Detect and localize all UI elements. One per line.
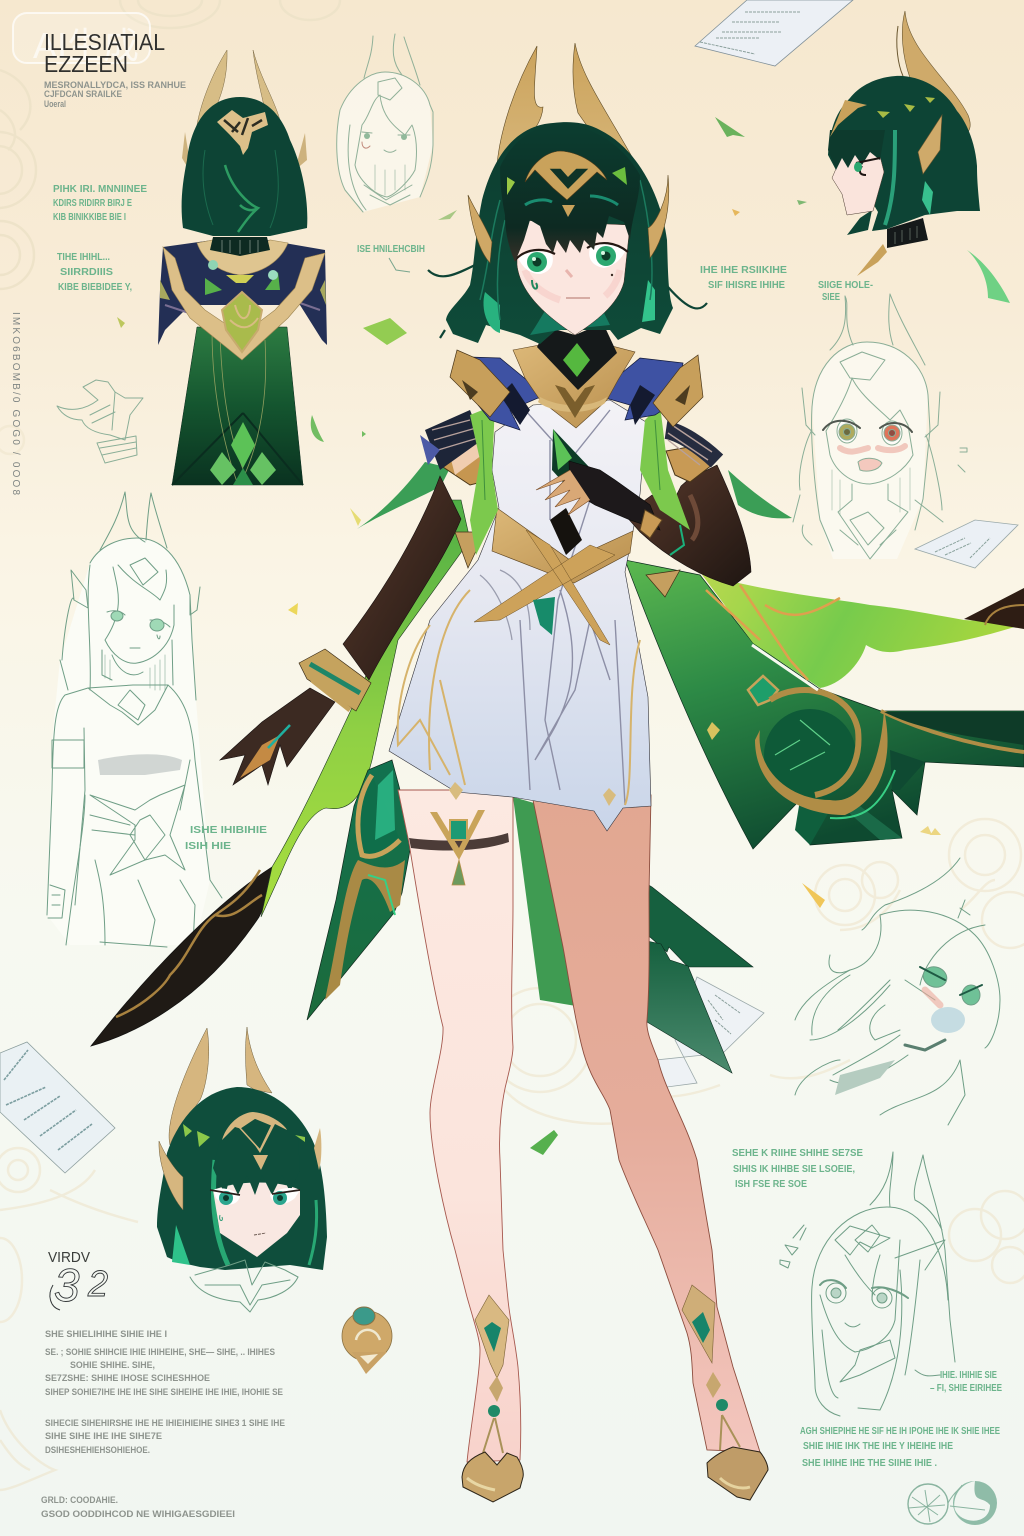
right cape: emblem ring bbox=[707, 676, 895, 818]
green annotation notes: KDIRS RIDIRR BIRJ E bbox=[53, 198, 132, 209]
gold ring charm bbox=[342, 1307, 392, 1374]
main head: golden tiara bbox=[525, 151, 607, 217]
back view: hair ornament bbox=[217, 110, 268, 155]
handwritten number: 3 bbox=[54, 1259, 80, 1311]
watermark badge bbox=[13, 13, 150, 66]
portrait: eyes and mouth bbox=[210, 1188, 300, 1235]
drifting leaves bbox=[117, 117, 1010, 1155]
lower-left stats block: SIHECIE SIHEHIRSHE IHE HE IHIEIHIEIHE SIHE3 1 SIHE IHE bbox=[45, 1418, 285, 1428]
right side wing and gold cuff bbox=[666, 425, 792, 518]
profile: neck collar bbox=[857, 218, 928, 276]
main head: ear fins bbox=[468, 175, 669, 263]
portrait: hair bbox=[157, 1087, 327, 1270]
back view: shoulders and mantle bbox=[158, 240, 327, 345]
right cape: main green panel bbox=[625, 560, 1024, 849]
portrait: collar sketch bbox=[190, 1260, 298, 1312]
pencil sketch: bashful face, top bbox=[337, 34, 433, 212]
lower-left stats block: GRLD: COODAHIE. bbox=[41, 1495, 118, 1505]
hand sketch bbox=[57, 380, 143, 463]
left hand with claws bbox=[220, 688, 335, 785]
green annotation notes: SIHIS IK HIHBE SIE LSOEIE, bbox=[733, 1164, 855, 1175]
green annotation notes: SEHE K RIIHE SHIHE SE7SE bbox=[732, 1148, 863, 1159]
title block bbox=[13, 13, 186, 109]
right leg bbox=[532, 795, 760, 1452]
central cape panel bbox=[307, 760, 410, 1020]
green annotation notes bbox=[53, 184, 1002, 1469]
green annotation notes: SIIRRDIIIS bbox=[60, 267, 113, 278]
green annotation notes: KIB BINIKKIBE BIE I bbox=[53, 212, 126, 223]
circular seal stamp bbox=[908, 1481, 997, 1525]
lower-left stats block: VIRDV bbox=[48, 1249, 90, 1266]
profile: face bbox=[828, 130, 885, 215]
annotation beside standing sketch: ISIH HIE bbox=[185, 841, 231, 852]
green annotation notes: ISH FSE RE SOE bbox=[735, 1179, 807, 1190]
title block: EZZEEN bbox=[44, 51, 128, 77]
lower-left stats block: SE. ; SOHIE SHIHCIE IHIE IHIHEIHE, SHE— SIHE, .. IHIHES bbox=[45, 1347, 275, 1357]
main head: eyes bbox=[515, 243, 628, 289]
green annotation notes: KIBE BIEBIDEE Y, bbox=[58, 282, 132, 293]
handwritten number: 2 bbox=[87, 1263, 108, 1304]
green annotation notes: SHE IHIHE IHE THE SIIHE IHIE . bbox=[802, 1458, 937, 1469]
left cape: lime panel bbox=[261, 500, 470, 917]
back view: golden collar and emblem bbox=[163, 237, 325, 360]
held green gem and black gloved hand bbox=[536, 429, 662, 538]
lower-left stats block: SE7ZSHE: SHIHE IHOSE SCIHESHHOE bbox=[45, 1373, 210, 1383]
main head: front bangs bbox=[500, 125, 640, 262]
green annotation notes: PIHK IRI. MNNIINEE bbox=[53, 184, 147, 195]
right arm glove bbox=[625, 465, 751, 586]
white dress bbox=[389, 400, 651, 831]
green annotation notes: IHE IHE RSIIKIHE bbox=[700, 265, 787, 276]
right cape: lime wing bbox=[700, 572, 1024, 690]
lower-left stats block: SIHE SIHE IHE IHE SIHE7E bbox=[45, 1431, 162, 1441]
blue shoulder pieces bbox=[468, 357, 683, 430]
lower-left stats block: GSOD OODDIHCOD NE WIHIGAESGDIEEI bbox=[41, 1509, 235, 1519]
green annotation notes: – FI, SHIE EIRIHEE bbox=[930, 1383, 1002, 1394]
lime strips beside torso bbox=[470, 405, 690, 555]
right shoe and anklet bbox=[682, 1285, 768, 1500]
profile: horn bbox=[897, 11, 970, 133]
back view figure bbox=[158, 50, 327, 485]
portrait: tiara and gems bbox=[183, 1112, 305, 1170]
bottom-left portrait head bbox=[157, 1027, 327, 1312]
main head: horns bbox=[497, 43, 642, 175]
right cape: lower strips behind leg bbox=[513, 797, 753, 1073]
title block: Uoeral bbox=[44, 99, 66, 109]
portrait: ear fins bbox=[159, 1128, 321, 1210]
lower-left stats block: SHE SHIELIHIHE SIHIE IHE I bbox=[45, 1329, 167, 1339]
back view: horns bbox=[182, 50, 307, 175]
handwritten number bbox=[50, 1259, 108, 1311]
back view: green robe bbox=[172, 327, 303, 485]
left arm cuff and stripes bbox=[420, 410, 492, 485]
profile: hair bbox=[828, 76, 980, 235]
lower-left stats block: SOHIE SHIHE. SIHE, bbox=[70, 1360, 155, 1370]
profile view head bbox=[828, 11, 980, 276]
annotation beside standing sketch: ISHE IHIBIHIE bbox=[190, 825, 267, 836]
left arm glove bbox=[343, 476, 461, 680]
pencil sketch: windswept head bbox=[795, 858, 1000, 1125]
profile: ear and ornaments bbox=[830, 97, 942, 215]
portrait: face bbox=[213, 1140, 300, 1257]
left cape: upper wing bbox=[357, 462, 450, 529]
gold neck collar bbox=[513, 323, 635, 428]
back view: hair bbox=[182, 97, 307, 236]
green annotation notes: IHIE. IHIHIE SIE bbox=[940, 1370, 997, 1381]
annotation beside standing sketch bbox=[185, 825, 267, 852]
green annotation notes: ISE HNILEHCBIH bbox=[357, 244, 425, 255]
title block: ILLESIATIAL bbox=[44, 29, 165, 55]
lower-left stats block: DSIHESHEHIEHSOHIEHOE. bbox=[45, 1445, 150, 1455]
title block: MESRONALLYDCA, ISS RANHUE bbox=[44, 80, 186, 90]
green annotation notes: SIEE bbox=[822, 292, 840, 303]
vertical side caption: IMKO6BOMB/0 GOG0 / 0OO8 bbox=[10, 312, 21, 495]
main head: back hair bbox=[428, 122, 707, 344]
portrait: horns bbox=[169, 1027, 272, 1145]
main head: face bbox=[517, 220, 630, 335]
left cape: dark tail bbox=[91, 867, 281, 1046]
pencil sketch: shocked face bbox=[793, 294, 967, 559]
green annotation notes: TIHE IHIHL... bbox=[57, 252, 110, 263]
lower-left stats block: SIHEP SOHIE7IHE IHE IHE SIHE SIHEIHE IHE IHIE, IHOHIE SE bbox=[45, 1387, 283, 1397]
green annotation notes: SIIGE HOLE- bbox=[818, 280, 873, 291]
watermark badge: AI生成 bbox=[33, 25, 139, 66]
lower-left stats block bbox=[41, 1249, 285, 1519]
main head: nose and mouth bbox=[566, 270, 613, 298]
green annotation notes: SHIE IHIE IHK THE IHE Y IHEIHE IHE bbox=[803, 1441, 953, 1452]
thigh garter bbox=[409, 810, 509, 885]
left leg bbox=[398, 790, 521, 1462]
title block: CJFDCAN SRAILKE bbox=[44, 89, 122, 99]
green annotation notes: SIF IHISRE IHIHE bbox=[708, 280, 785, 291]
left bracelet bbox=[299, 649, 371, 711]
waist belt and ribbons bbox=[455, 508, 680, 645]
pencil sketch: smiling face bbox=[780, 1152, 955, 1416]
loose paper sheets bbox=[0, 0, 1018, 1173]
gold shoulder plates bbox=[450, 350, 703, 427]
left shoe and anklet bbox=[462, 1295, 523, 1502]
pencil sketch: standing front view bbox=[47, 492, 222, 947]
